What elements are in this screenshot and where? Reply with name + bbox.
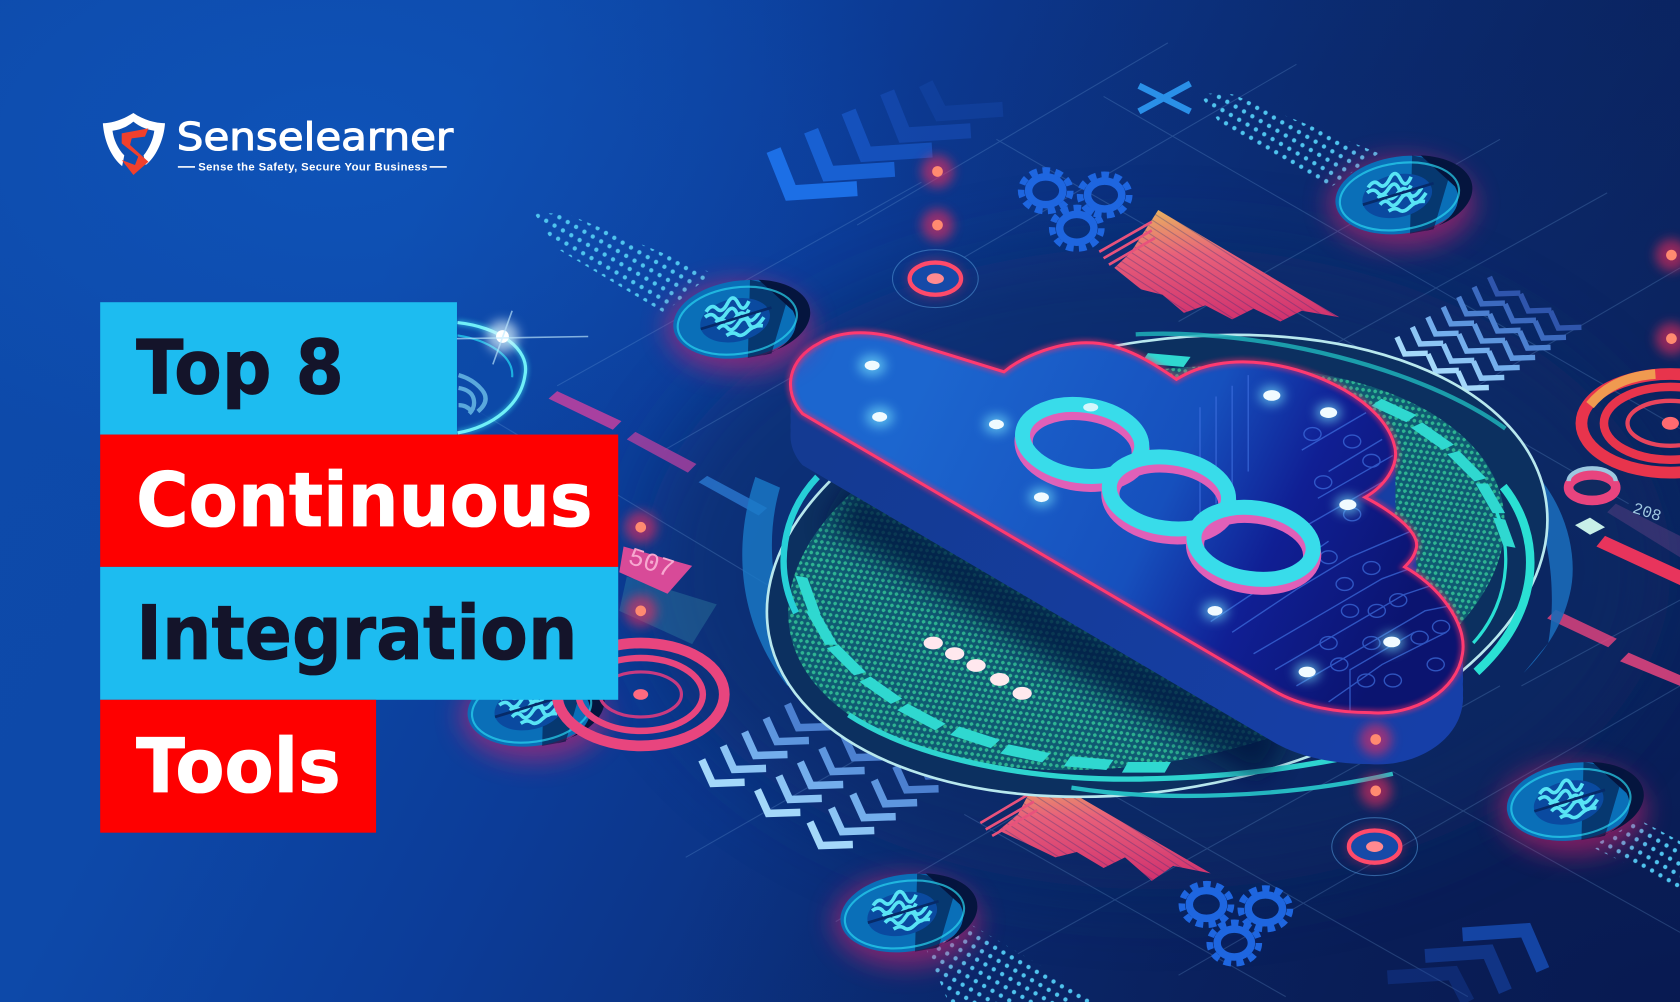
logo — [103, 113, 453, 175]
title line: Integration: Integration — [136, 589, 577, 677]
brain disc: top right — [1329, 148, 1474, 249]
brain disc: bottom — [834, 866, 979, 967]
title — [100, 302, 618, 833]
chevrons: upper right — [1397, 277, 1581, 388]
chart: pink bars bottom — [980, 774, 1211, 881]
cloud extrusion — [790, 344, 1463, 764]
circuit traces — [1199, 375, 1450, 710]
icon: red signal dots — [921, 155, 1680, 807]
title line: Continuous: Continuous — [136, 456, 593, 544]
readout 507: 507 — [624, 543, 677, 585]
white dot row — [924, 637, 1032, 700]
tagline: Sense the Safety, Secure Your Business — [198, 161, 427, 173]
chart: pink bars top — [1099, 210, 1339, 321]
cloud shadow — [841, 504, 1275, 756]
title line: Top 8 — [100, 302, 457, 435]
icon: gears top — [1021, 170, 1129, 249]
title line: Tools: Tools — [136, 722, 341, 810]
rings — [1018, 397, 1318, 593]
cloud neon outline — [790, 333, 1463, 713]
star glint — [455, 311, 588, 364]
readout 208: 208 — [1630, 500, 1663, 526]
cloud — [790, 333, 1479, 764]
icon: top chevrons — [774, 84, 1003, 193]
brand name: Senselearner — [177, 115, 453, 160]
icon: shield — [103, 113, 165, 175]
icon: bottom-right chevrons — [1388, 930, 1543, 1002]
brain disc: right — [1500, 754, 1646, 855]
ring dashes — [795, 353, 1516, 773]
dot stream: top right — [1199, 93, 1379, 190]
brain disc: centre left — [666, 272, 812, 373]
cloud top — [790, 333, 1463, 713]
title line: Top 8: Top 8 — [136, 323, 344, 411]
title line: Tools — [100, 700, 376, 833]
brain disc: lower left — [461, 660, 606, 761]
glowing ring and brain — [395, 311, 588, 433]
dot stream: bottom right — [1591, 820, 1680, 889]
icon: X mark — [1139, 84, 1190, 111]
title line: Integration — [100, 567, 618, 700]
chart: base ring — [730, 277, 1584, 855]
icon: target top — [892, 250, 978, 308]
data labels right — [1547, 504, 1680, 686]
title line: Continuous — [100, 435, 618, 567]
readout 507 — [619, 511, 717, 644]
donut gauge — [1569, 468, 1616, 500]
concentric dial right — [1581, 374, 1680, 473]
icon: gears bottom — [1182, 884, 1290, 963]
chevrons: lower left — [702, 676, 981, 846]
icon: target bottom — [1332, 818, 1418, 876]
dot stream: centre left — [534, 212, 712, 313]
cyan arcs — [784, 477, 818, 613]
concentric dial left — [557, 643, 724, 746]
cloud lights — [858, 355, 1405, 682]
outer arcs — [742, 477, 806, 686]
data labels left — [549, 391, 767, 515]
dot stream: bottom — [925, 924, 1093, 1002]
